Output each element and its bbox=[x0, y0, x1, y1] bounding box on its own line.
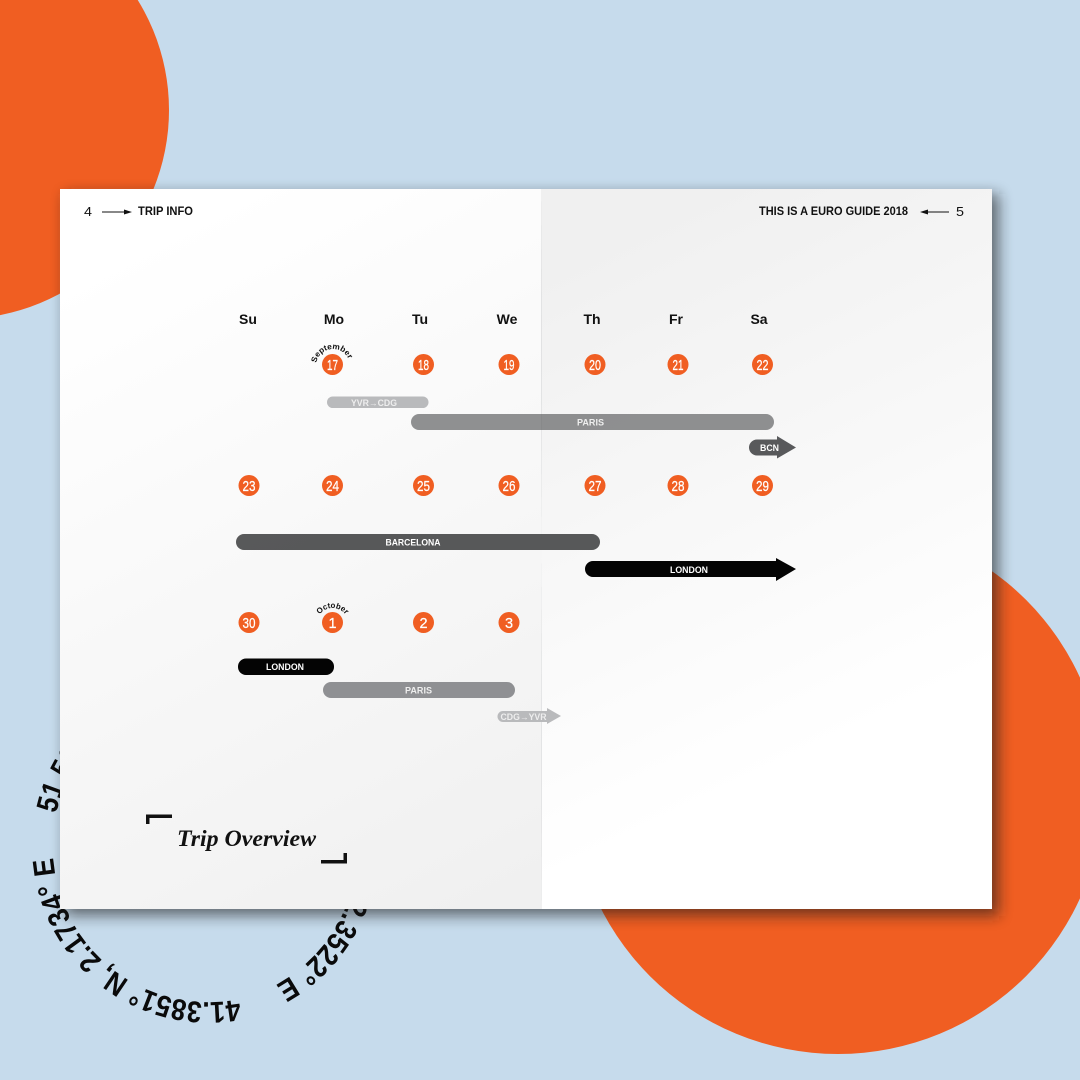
date markers row 2: 24 bbox=[326, 479, 339, 495]
bar: Paris return: PARIS bbox=[405, 686, 432, 696]
weekday headings: Tu bbox=[412, 311, 428, 327]
date markers row 1: 21 bbox=[672, 358, 684, 374]
bar: Paris return bbox=[323, 682, 515, 698]
header right: THIS IS A EURO GUIDE 2018 bbox=[759, 204, 908, 218]
date markers row 1 bbox=[322, 354, 773, 375]
title block: Trip Overview bbox=[177, 826, 316, 852]
circular coordinates text bbox=[32, 750, 366, 1023]
date markers row 1: 17 bbox=[327, 358, 338, 374]
header left: TRIP INFO bbox=[138, 204, 193, 218]
arrow bar: London: LONDON bbox=[670, 565, 708, 576]
title block bbox=[146, 814, 347, 864]
corner bracket top left bbox=[146, 814, 172, 824]
arrow bar: London bbox=[585, 558, 796, 581]
orange circle top left bbox=[0, 0, 169, 319]
weekday headings: Su bbox=[239, 311, 257, 327]
date markers row 1: 22 bbox=[756, 358, 768, 374]
bar: Paris bbox=[411, 414, 774, 430]
header right: 5 bbox=[956, 204, 964, 219]
date markers row 3: 3 bbox=[505, 616, 513, 632]
circular coordinates text: 48.8566° N, 2.3522° E bbox=[276, 909, 366, 1002]
bar: Barcelona bbox=[236, 534, 600, 550]
month label: September: September bbox=[311, 344, 352, 362]
weekday headings: Th bbox=[583, 311, 601, 327]
orange circle bottom right bbox=[572, 522, 1080, 1054]
date markers row 2: 23 bbox=[242, 479, 256, 495]
arrow bar: CDG to YVR bbox=[498, 708, 561, 724]
header left: 4 bbox=[84, 204, 92, 219]
bar: YVR to CDG bbox=[327, 396, 428, 408]
circular coordinates text: 51.5074° N, 0.1278° W bbox=[36, 750, 60, 812]
right page bbox=[541, 189, 992, 909]
corner bracket bottom right bbox=[321, 853, 347, 864]
circular coordinates text: 41.3851° N, 2.1734° E bbox=[32, 858, 240, 1023]
date markers row 3: 1 bbox=[328, 616, 337, 632]
arrow bar: BCN bbox=[749, 436, 796, 458]
arrow bar: BCN: BCN bbox=[760, 443, 779, 454]
weekday headings: Fr bbox=[669, 311, 684, 327]
weekday headings bbox=[239, 311, 768, 327]
bar: Paris: PARIS bbox=[577, 418, 604, 428]
date markers row 2: 28 bbox=[672, 479, 684, 495]
bar: London: LONDON bbox=[266, 662, 304, 673]
month label: October: October bbox=[316, 602, 349, 614]
date markers row 1: 19 bbox=[504, 358, 514, 374]
date markers row 2 bbox=[238, 475, 773, 496]
arrow left bbox=[920, 210, 949, 214]
date markers row 3: 2 bbox=[419, 616, 428, 632]
date markers row 1: 18 bbox=[418, 358, 429, 374]
bar: Barcelona: BARCELONA bbox=[386, 538, 441, 548]
header left bbox=[84, 204, 193, 219]
bar: London bbox=[238, 658, 334, 675]
left page bbox=[60, 189, 542, 909]
date markers row 3: 30 bbox=[242, 616, 256, 632]
date markers row 3 bbox=[238, 612, 520, 633]
arrow bar: CDG to YVR: CDG→YVR bbox=[500, 712, 547, 722]
arrow right bbox=[102, 210, 132, 214]
weekday headings: Mo bbox=[324, 311, 344, 327]
date markers row 1: 20 bbox=[589, 358, 601, 374]
page shadow bbox=[65, 194, 999, 916]
weekday headings: We bbox=[497, 311, 518, 327]
booklet spread bbox=[60, 189, 992, 909]
date markers row 2: 29 bbox=[756, 479, 769, 495]
weekday headings: Sa bbox=[750, 311, 768, 327]
bar: YVR to CDG: YVR→CDG bbox=[351, 398, 397, 408]
date markers row 2: 27 bbox=[588, 479, 602, 495]
date markers row 2: 26 bbox=[502, 479, 516, 495]
date markers row 2: 25 bbox=[417, 479, 430, 495]
